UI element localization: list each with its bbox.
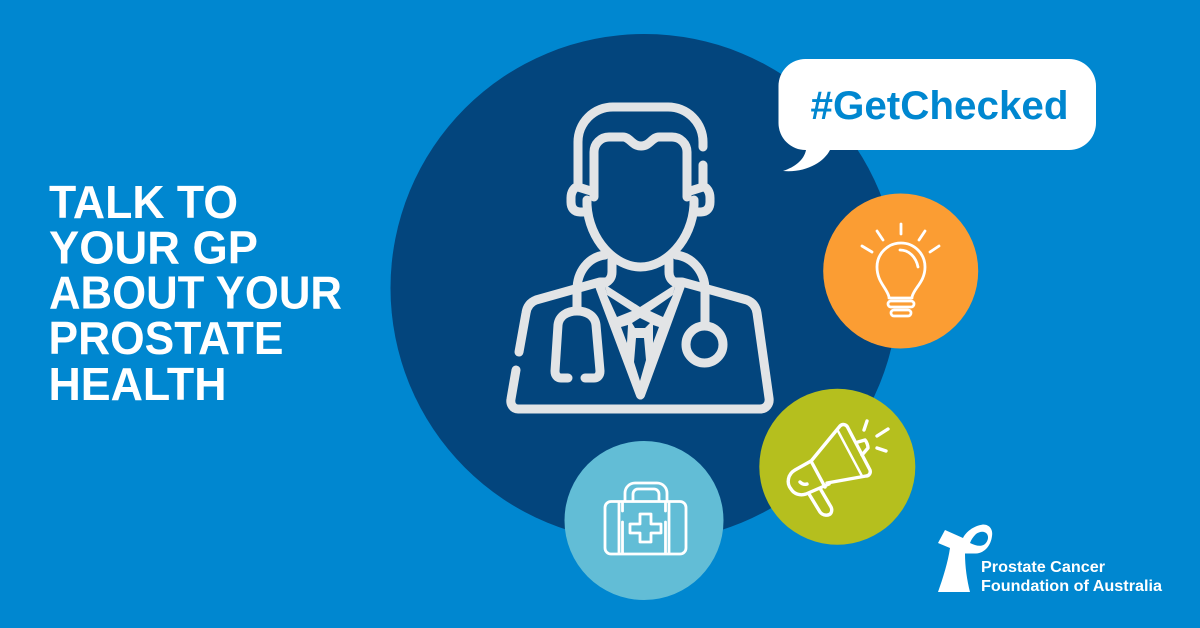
logo text: Foundation of Australia <box>981 578 1162 595</box>
logo text <box>981 559 1162 595</box>
logo text: Prostate Cancer <box>981 559 1105 576</box>
green circle with megaphone <box>759 389 915 545</box>
title: ABOUT YOUR <box>49 266 342 318</box>
title: YOUR GP <box>49 222 258 274</box>
logo: Prostate Cancer Foundation <box>938 524 1162 595</box>
hashtag text: #GetChecked <box>810 84 1068 128</box>
title <box>48 176 342 410</box>
logo ribbon <box>938 524 992 592</box>
title: TALK TO <box>49 176 238 228</box>
light blue circle with medical kit <box>564 441 724 600</box>
orange circle with light bulb <box>823 194 978 348</box>
title: HEALTH <box>48 358 226 410</box>
speech bubble <box>778 59 1096 171</box>
icon: doctor <box>511 107 769 409</box>
dark blue circle <box>390 34 898 542</box>
title: PROSTATE <box>48 312 284 364</box>
tie and collar <box>604 284 676 395</box>
